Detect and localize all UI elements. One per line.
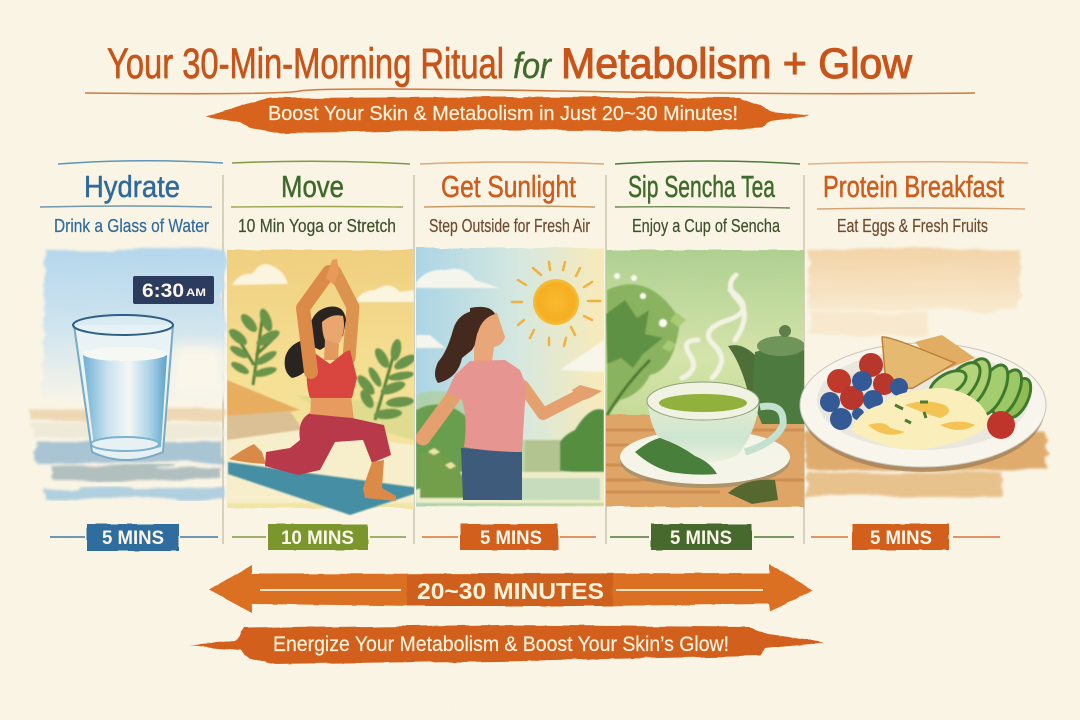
steam <box>682 275 744 378</box>
illustration: yoga pose <box>220 250 420 515</box>
toast <box>915 335 975 372</box>
arrow: 20~30 minutes: 20~30 MINUTES <box>417 578 604 604</box>
title <box>107 40 913 88</box>
plate <box>801 346 1045 472</box>
cup <box>745 406 783 452</box>
footer banner <box>188 625 824 664</box>
duration: 5 mins sunlight <box>422 524 596 550</box>
panel: sencha heading <box>615 169 790 236</box>
footer banner: Energize Your Metabolism & Boost Your Skin’s Glow! <box>273 633 729 656</box>
icon: sun <box>512 262 600 346</box>
panel: hydrate heading: Drink a Glass of Water <box>54 216 209 236</box>
landscape <box>416 391 604 506</box>
illustration: sencha tea <box>600 250 810 507</box>
time badge: 6:30 <box>142 281 184 302</box>
panel: sunlight heading: Get Sunlight <box>441 169 576 204</box>
mat <box>228 462 420 515</box>
title: Your 30-Min-Morning Ritual <box>107 40 504 88</box>
duration: 5 mins sunlight: 5 MINS <box>480 528 542 549</box>
panel: protein heading: Eat Eggs & Fresh Fruits <box>837 216 988 236</box>
duration: 5 mins tea: 5 MINS <box>670 528 732 549</box>
title: for <box>513 45 553 86</box>
panel: sencha heading: Sip Sencha Tea <box>628 169 776 204</box>
illustration: sunlight <box>410 248 610 506</box>
duration: 5 mins tea <box>610 524 794 550</box>
subtitle banner: Boost Your Skin & Metabolism in Just 20~30 Minutes! <box>268 103 738 125</box>
panel: protein heading: Protein Breakfast <box>823 169 1004 204</box>
subtitle banner <box>205 97 810 133</box>
plant <box>606 273 686 415</box>
panel: hydrate heading <box>40 169 212 236</box>
illustration: glass of water <box>30 250 224 499</box>
duration: 5 mins hydrate <box>50 524 218 551</box>
ground <box>227 380 414 503</box>
duration: 5 mins breakfast: 5 MINS <box>870 528 932 549</box>
panel: sunlight heading: Step Outside for Fresh Air <box>429 216 590 236</box>
cucumber slices <box>926 354 1036 421</box>
leaves <box>635 438 717 475</box>
plants <box>226 307 418 420</box>
loose tea <box>728 480 778 504</box>
panel: move heading: 10 Min Yoga or Stretch <box>238 216 396 236</box>
sunlight woman <box>423 307 602 500</box>
illustration: protein breakfast <box>800 250 1046 496</box>
panel: sencha heading: Enjoy a Cup of Sencha <box>632 216 781 236</box>
saucer <box>620 458 790 488</box>
panel: hydrate heading: Hydrate <box>84 169 180 204</box>
panel: move heading <box>231 169 403 236</box>
berries <box>820 353 908 430</box>
duration: 5 mins breakfast <box>811 524 1000 550</box>
time badge: AM <box>186 287 206 299</box>
duration: 10 mins move: 10 MINS <box>281 528 354 549</box>
scrambled eggs <box>851 388 990 449</box>
duration: 10 mins move <box>232 524 406 550</box>
time badge <box>133 276 214 304</box>
duration: 5 mins hydrate: 5 MINS <box>102 528 164 549</box>
arrow: 20~30 minutes <box>209 564 813 613</box>
yoga woman <box>229 259 396 501</box>
panel: sunlight heading <box>424 169 595 236</box>
panel: protein heading <box>817 169 1025 236</box>
icon: glass <box>73 315 173 460</box>
teapot <box>728 325 805 424</box>
title: Metabolism + Glow <box>561 40 913 88</box>
panel: move heading: Move <box>281 169 344 204</box>
